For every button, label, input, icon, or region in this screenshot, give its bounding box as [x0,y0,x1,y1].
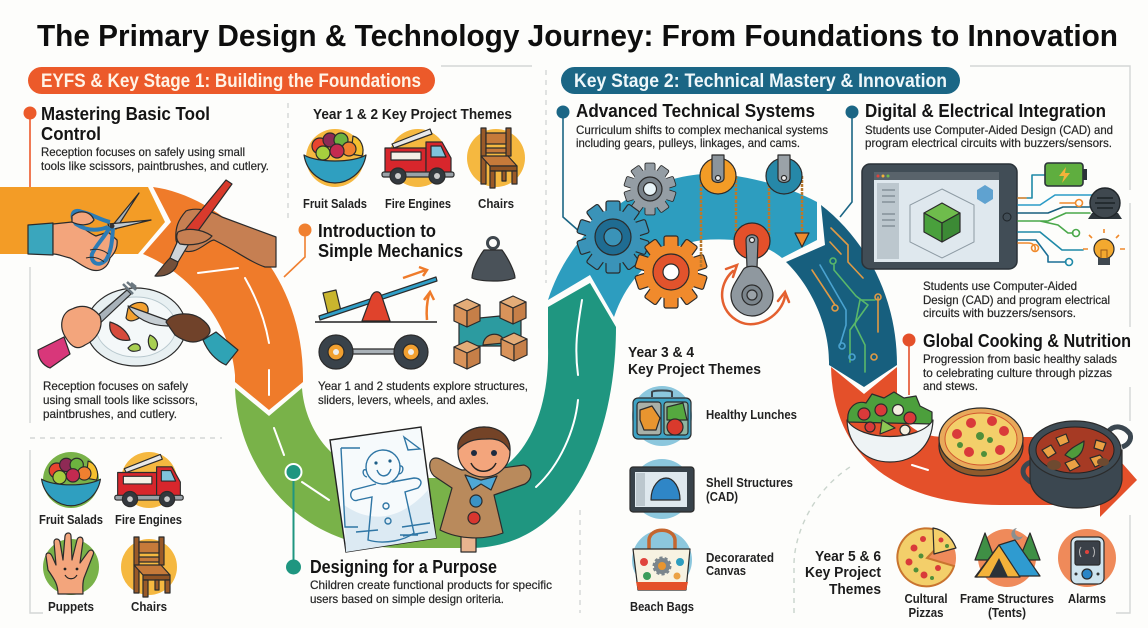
text: CAD note: circuits with buzzers/sensors. [923,306,1076,320]
panel: advanced technical systems [556,101,828,232]
pulley: blue [766,155,802,194]
title: The Primary Design & Technology Journey: From Foundations to Innovation [37,19,1118,53]
icon: battery, speaker, bulb and wiring [1018,163,1125,266]
labels: year 3 & 4: (CAD) [706,490,738,504]
heading: year 1 & 2: Year 1 & 2 Key Project Themes [313,106,512,123]
panel: year 3 and 4 project themes: Key Project Themes [628,361,761,378]
panel: mastering basic tool control: tools like scissors, paintbrushes, and cutlery. [41,159,269,173]
road: red arrow segment [831,367,1137,517]
heading: designing: Designing for a Purpose [310,557,497,577]
section header: Key Stage 2: Key Stage 2: Technical Mastery & Innovation [574,71,947,92]
marker: mastering [29,113,31,187]
labels: year 1 & 2: Fruit Salads [303,197,367,211]
labels: year 1 & 2: Chairs [478,197,514,211]
icon: design blueprint sheet [330,427,436,552]
heading: year 5 & 6: Year 5 & 6 [815,548,881,565]
panel: global cooking and nutrition: to celebrating culture through pizzas [923,366,1112,380]
battery [1045,163,1087,186]
text: reception note: using small tools like scissors, [43,393,198,407]
icon: chair [121,537,177,597]
icon: weight [472,238,515,281]
speaker [1088,188,1122,219]
labels: lower left themes [39,513,182,614]
labels: year 5 & 6: Pizzas [908,606,944,620]
heading: year 3 & 4: Year 3 & 4 [628,344,695,361]
icon: chair [467,128,525,188]
panel: year 5 and 6 project themes [805,528,1116,620]
icon: tablet with CAD [862,164,1017,269]
icon: hands with plate and cutlery [38,282,238,368]
labels: lower left themes: Fruit Salads [39,513,103,527]
rope [701,176,802,268]
panel: introduction to simple mechanics [284,221,528,407]
road: teal segment [470,283,616,548]
text: CAD note: Students use Computer-Aided [923,279,1077,293]
icon: stew pot [1023,421,1131,508]
section header: EYFS & Key Stage 1: EYFS & Key Stage 1: Building the Foundations [41,71,421,92]
heading: digital: Digital & Electrical Integration [865,101,1106,121]
road: dark blue segment [786,205,897,387]
description: cooking: Progression from basic healthy salads [923,352,1117,366]
labels: year 5 & 6 [904,592,1106,620]
marker: cooking [908,340,910,395]
labels: year 5 & 6: Cultural [904,592,948,606]
heading: mechanics: Introduction to [318,221,436,241]
road: orange segment [143,187,303,410]
heading: cooking: Global Cooking & Nutrition [923,331,1131,351]
wiring [1018,175,1092,266]
icon: fruit salad [304,129,366,187]
description: designing: Children create functional products for specific [310,578,552,592]
text: CAD note [923,279,1110,320]
panel: digital and electrical integration [840,101,1113,217]
icon: puppet hand [43,533,99,595]
icon: beach bag [632,530,692,590]
description: mechanics: Year 1 and 2 students explore structures, [318,379,528,393]
icon: wheels and axle [319,335,428,369]
description: mechanics [318,379,528,407]
panel: designing for a purpose: users based on simple design oriteria. [310,592,504,606]
panel: designing for a purpose [286,464,552,606]
gear: orange [635,236,707,308]
labels: year 3 & 4: Healthy Lunches [706,408,797,422]
labels: year 3 & 4: Decorarated [706,551,774,565]
text: CAD note: Design (CAD) and program electrical [923,293,1110,307]
description: mastering: Reception focuses on safely using small [41,145,245,159]
marker: designing [292,472,294,567]
icon: hand with scissors [28,193,151,270]
panel: global cooking and nutrition [902,331,1131,395]
description: advanced: Curriculum shifts to complex mechanical systems [576,123,828,137]
icon: tent [975,528,1040,587]
text: reception note: Reception focuses on safely [43,379,188,393]
panel: advanced technical systems: including gears, pulleys, linkages, and cams. [576,136,800,150]
labels: lower left themes: Puppets [48,600,94,614]
labels: year 5 & 6: Frame Structures [960,592,1054,606]
labels: year 3 & 4: Beach Bags [630,600,694,614]
labels: year 3 & 4: Shell Structures [706,476,793,490]
panel: global cooking and nutrition: and stews. [923,379,978,393]
arrow: load [795,233,809,247]
icon: cultural pizza [897,528,956,587]
pulley: orange [700,155,736,194]
labels: lower left themes: Fire Engines [115,513,182,527]
icon: seesaw lever [315,267,437,322]
panel: digital and electrical integration: program electrical circuits with buzzers/sensors. [865,136,1112,150]
labels: year 5 & 6: Alarms [1068,592,1106,606]
icon: fire engine [115,452,183,508]
icon: gears [577,163,707,308]
labels: year 1 & 2 [303,197,514,211]
text: reception note: paintbrushes, and cutlery. [43,407,177,421]
text: reception note [43,379,198,421]
panel: introduction to simple mechanics: Simple Mechanics [318,241,463,261]
icon: alarm [1058,529,1116,587]
icon: fruit salad [42,452,100,508]
icon: pizza [939,408,1023,476]
heading: mastering: Mastering Basic Tool [41,104,210,124]
circuit traces on dark band [812,228,881,372]
panel: year 5 and 6 project themes: Key Project [805,564,881,581]
road: amber start segment [0,187,165,254]
description: mechanics: sliders, levers, wheels, and axles. [318,393,489,407]
icon: fire engine [382,129,454,187]
panel: lower left project themes [39,452,183,614]
gear: grey [624,163,676,215]
icon: tablet shell structure [630,459,694,519]
heading: advanced: Advanced Technical Systems [576,101,815,121]
marker: digital [840,112,852,217]
panel: mastering basic tool control [24,104,269,187]
panel: year 5 and 6 project themes: Themes [829,581,881,598]
road: blue segment [548,174,817,317]
icon: lunchbox [632,386,692,446]
marker: advanced [563,112,580,232]
labels: year 3 & 4 [630,408,797,614]
labels: year 3 & 4: Canvas [706,564,746,578]
icon: pulleys and cam [700,155,809,324]
labels: year 1 & 2: Fire Engines [385,197,451,211]
description: digital: Students use Computer-Aided Design (CAD) and [865,123,1113,137]
icon: hand puppet [430,427,531,552]
panel: year 1 and 2 project themes [303,106,525,211]
icon: hand with paintbrush [155,180,276,276]
bulb [1083,229,1125,265]
journey road [0,174,1137,548]
arrow: rotation [722,265,789,324]
labels: lower left themes: Chairs [131,600,167,614]
gear: blue [577,201,649,273]
pulley: red with cam [731,223,773,316]
road: green segment [235,388,470,548]
labels: year 5 & 6: (Tents) [988,606,1026,620]
marker: mechanics [284,230,305,277]
icon: salad bowl [847,392,933,462]
icon: building blocks [454,296,527,369]
panel: year 3 and 4 project themes [628,344,797,614]
panel: mastering basic tool control: Control [41,124,101,144]
